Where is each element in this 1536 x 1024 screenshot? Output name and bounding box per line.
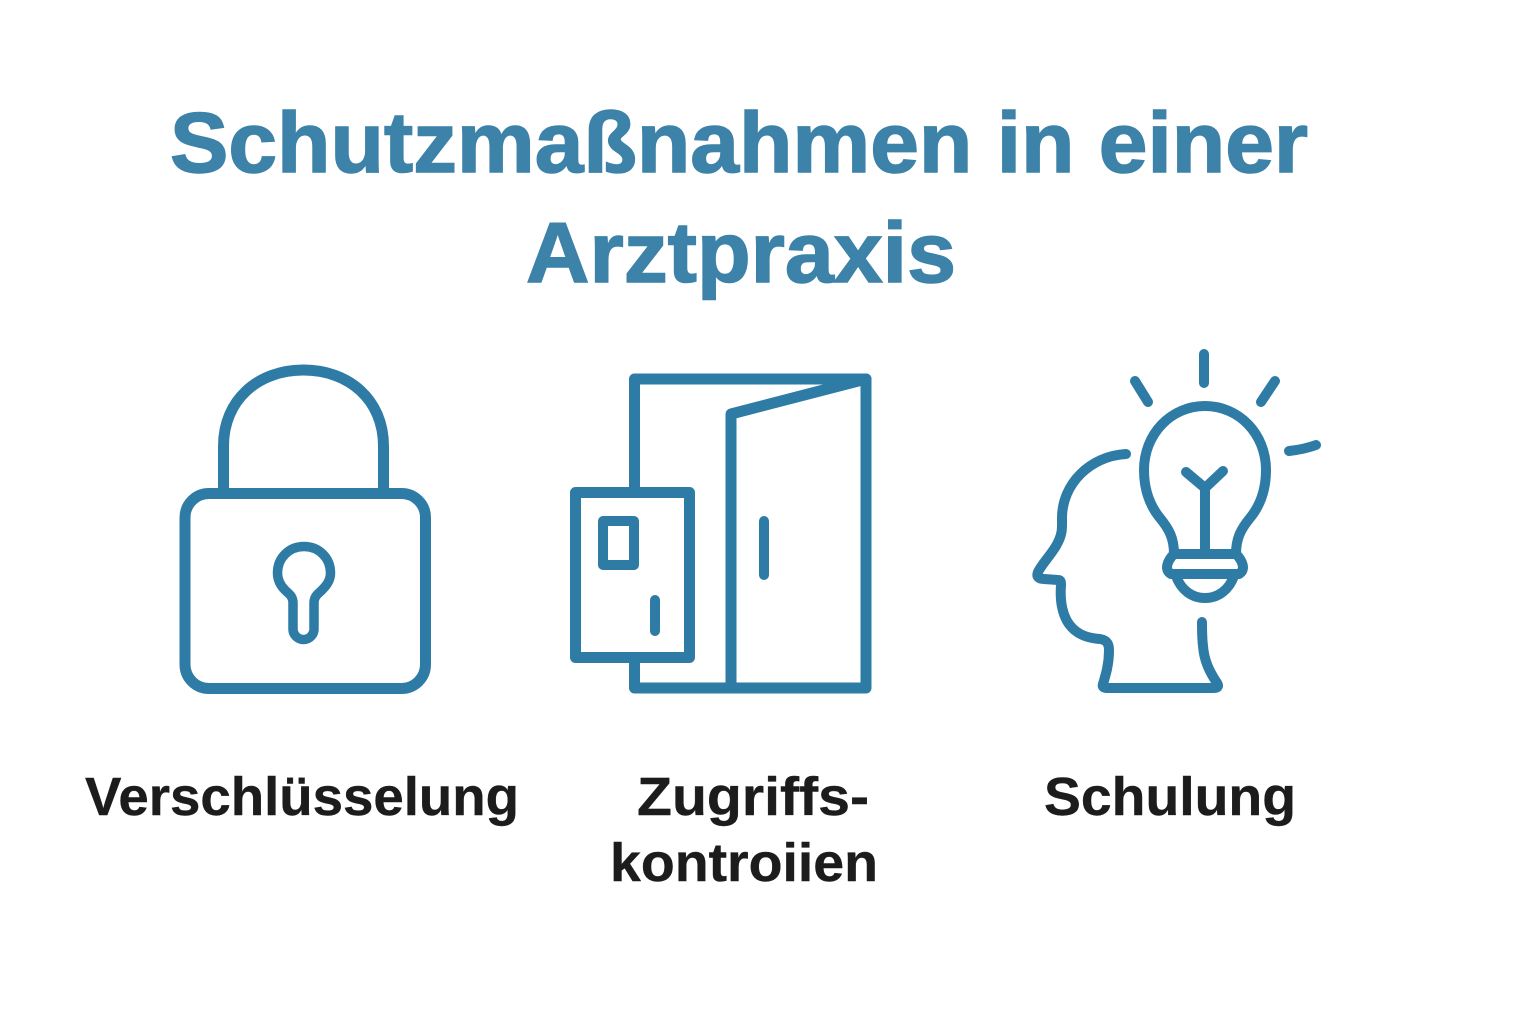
title: Arztpraxis bbox=[526, 206, 956, 301]
label: Verschlüsselung: Verschlüsselung bbox=[85, 767, 519, 827]
label: Zugriffskontrollen: kontroiien bbox=[610, 833, 878, 893]
icon: door with access card bbox=[576, 379, 866, 688]
icon: padlock bbox=[185, 370, 426, 688]
icon: head with light bulb bbox=[1037, 354, 1316, 688]
head outline bbox=[1037, 454, 1218, 688]
label: Schulung: Schulung bbox=[1044, 767, 1296, 827]
light bulb bbox=[1144, 406, 1266, 554]
label: Zugriffskontrollen: Zugriffs- bbox=[637, 767, 869, 827]
label: Zugriffskontrollen bbox=[610, 767, 878, 893]
title: Schutzmaßnahmen in einer bbox=[170, 96, 1308, 191]
light rays bbox=[1135, 354, 1316, 451]
title bbox=[170, 96, 1308, 301]
